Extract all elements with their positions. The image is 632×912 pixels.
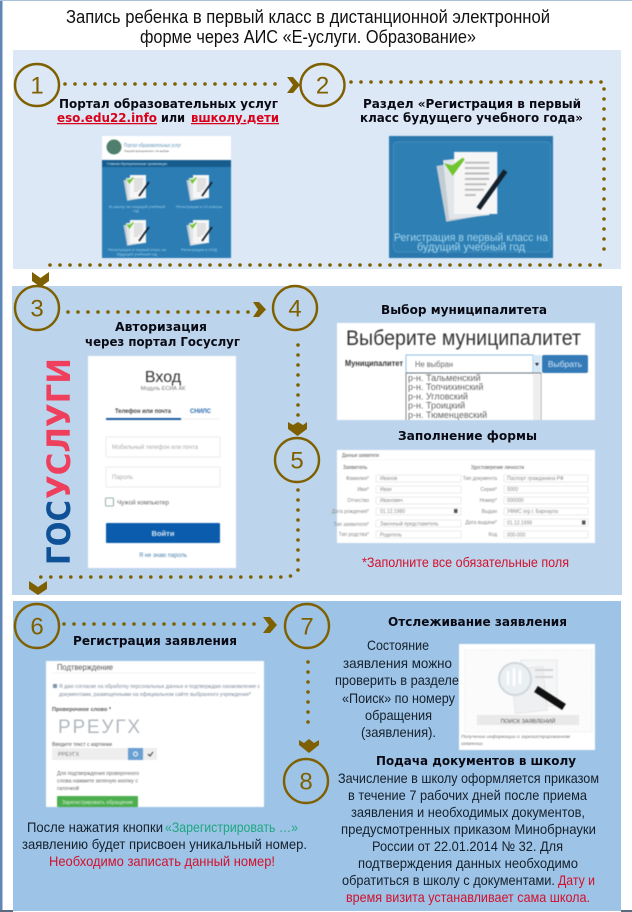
screenshot: registration section [389,136,553,258]
text: enrolment details [338,770,599,905]
heading: section: Раздел «Регистрация в первый [363,96,581,111]
screenshot: application form: Родитель [380,532,402,538]
screenshot: application form: Тип родства* [339,532,369,538]
text: unique number note: После нажатия кнопки [27,819,163,835]
screenshot: confirmation: Зарегистрировать обращение [62,800,133,806]
screenshot: portal: Портал образовательных услуг [124,143,181,149]
step 1 badge [15,64,59,106]
title: форме через АИС «Е-услуги. Образование» [140,27,476,47]
login card: Пароль [112,475,133,481]
screenshot: application form: Иванович [380,498,403,504]
logo: gosuslugi: УСЛУГИ [40,358,78,499]
screenshot: application form: Номер* [480,498,497,504]
text: enrolment details: Дату и [558,872,595,888]
arrow: step 4 to 5 [288,345,307,436]
screenshot: municipality select: Муниципалитет [345,359,403,368]
text: enrolment details: время визита устанавливает сама школа. [346,889,590,905]
heading: authorisation: через портал Госуслуг [85,334,240,349]
heading: tracking: Отслеживание заявления [388,614,567,629]
login card: Я не знаю пароль [139,553,187,559]
screenshot: application form: Дата рождения* [332,509,369,515]
text: enrolment details: в течение 7 рабочих дней после приема [348,787,587,803]
screenshot: application form: Серия* [480,487,497,493]
title [66,7,550,47]
step 2 badge [300,64,344,106]
screenshot: municipality select: р-н. Угловский [408,392,468,402]
screenshot: registration section: будущий учебный год [417,242,526,254]
screenshot: application form: Иванов [380,476,398,482]
login card: Вход [145,369,182,386]
screenshot: application form: Выдан [482,509,497,515]
text: enrolment details: предусмотренных приказом Минобрнауки [341,821,596,837]
screenshot: application form: Законный представитель [380,520,439,528]
screenshot: application form: Тип заявителя* [334,522,369,528]
heading: registration: Регистрация заявления [73,633,237,648]
screenshot: portal: будущий учебный год [117,252,158,256]
step 4 badge [273,286,317,330]
screenshot: application form: Иван [380,487,392,493]
screenshot: portal: Текущий муниципалитет: Не выбран [124,149,169,153]
screenshot: portal: Регистрация в первый класс на [108,248,167,252]
text: tracking status: заявления можно [343,655,452,671]
logo: gosuslugi: ГОС [40,500,78,565]
login card: Мобильный телефон или почта [112,444,199,451]
screenshot: confirmation [46,661,264,807]
heading: portal: вшколу.дети [191,110,279,125]
text: tracking status: Состояние [367,637,429,653]
panel: steps 6-8 [13,601,621,911]
text: unique number note: «Зарегистрировать …» [165,819,298,835]
step 3 badge: 3 [30,296,44,322]
arrow: step 7 to 8 [299,662,319,753]
text: tracking status: «Поиск» по номеру [342,690,455,706]
arrow: step 3 to 4 [68,302,266,317]
screenshot: application form: Паспорт гражданина РФ [507,476,564,482]
arrow: step 1 to 2 [65,77,300,93]
heading: authorisation: Авторизация [115,319,207,334]
step 6 badge [15,604,59,648]
screenshot: confirmation: документами, размещенными на официальном сайте выбранного учреждения* [59,691,252,698]
text: tracking status: (заявления). [361,724,436,740]
screenshot: municipality select: р-н. Тальменский [408,373,481,383]
text: enrolment details: заявления и необходимых документов, [351,804,585,820]
heading: fill form: Заполнение формы [398,428,537,443]
note: required fields: *Заполните все обязательные поля [362,555,569,570]
text: tracking status [335,637,459,740]
login card: Телефон или почта [115,408,172,415]
heading: portal: eso.edu22.info [57,110,157,125]
screenshot: municipality select: р-н. Топчихинский [408,382,483,392]
login card: Войти [152,529,175,538]
screenshot: application form: Данные заявителя [342,453,379,459]
logo: gosuslugi [40,358,78,565]
login card: СНИЛС [190,409,212,415]
screenshot: municipality select [337,323,595,420]
screenshot: portal: Главная Муниципальные организации [107,162,167,166]
heading: documents: Подача документов в школу [376,753,576,768]
step 7 badge [285,604,329,648]
screenshot: portal: год [133,209,139,213]
screenshot: confirmation: РРЕУГХ [58,717,140,738]
arrow: step 5 to 6 [29,490,298,595]
step 8 badge [284,759,328,803]
screenshot: application form: УФМС org г. Барнаула [507,509,558,515]
screenshot: municipality select: р-н. Тюменцевский [408,410,487,420]
heading: section [360,96,583,125]
text: enrolment details: обратиться в школу с документами. [342,872,555,888]
screenshot: confirmation: Подтверждение [57,662,113,672]
screenshot: application form: Заявитель [343,465,368,471]
screenshot: confirmation: галочкой [57,785,79,792]
screenshot: portal [102,136,231,258]
screenshot: municipality select: Выберите муниципалитет [346,327,581,350]
arrow: step 2 to 3 [32,82,604,287]
login card [88,356,236,568]
step 2 badge: 2 [316,72,329,100]
screenshot: application form [332,450,595,543]
screenshot: application form: Удостоверение личности [471,465,524,471]
screenshot: application search: заявлении [460,741,483,746]
arrow: step 6 to 7 [64,617,277,633]
screenshot: registration section: Регистрация в первый класс на [394,232,549,244]
step 5 badge [275,438,319,482]
panel: steps 1-2 [13,50,621,287]
screenshot: municipality select: Не выбран [415,359,453,369]
screenshot: confirmation: Проверочное слово * [52,707,112,713]
screenshot: application form: Тип документа [463,476,497,482]
text: enrolment details: России от 22.01.2014 № 32. Для [372,838,563,854]
screenshot: application form: 000-000 [507,532,526,538]
heading: section: класс будущего учебного года» [360,110,583,125]
screenshot: confirmation: Я даю согласие на обработку персональных данных и подтверждаю ознакомление с [59,684,260,690]
text: unique number note [22,819,307,869]
heading: authorisation [85,319,240,349]
login card: Модуль ЕСИА АК [141,386,186,392]
screenshot: portal: Регистрация в ООД [181,248,217,252]
screenshot: municipality select: Выбрать [548,359,583,369]
screenshot: application form: Дата выдачи* [465,520,497,526]
step 7 badge: 7 [300,614,314,640]
screenshot: portal: Регистрация в 10 классы [176,205,222,209]
text: enrolment details: Зачисление в школу оформляется приказом [338,770,599,786]
screenshot: application form: 01.12.1999 [507,520,532,526]
text: tracking status: обращения [365,707,432,723]
screenshot: application form: Имя* [357,487,369,493]
screenshot: application form: Отчество [347,498,369,504]
heading: municipality: Выбор муниципалитета [381,302,547,317]
step 1 badge: 1 [30,72,44,100]
text: unique number note: заявлению будет присвоен уникальный номер. [22,836,307,852]
screenshot: confirmation: РРЕУГХ [58,752,79,758]
step 5 badge: 5 [290,448,304,474]
title: Запись ребенка в первый класс в дистанционной электронной [66,7,550,27]
screenshot: portal: В школу на текущий учебный [109,205,165,209]
heading: portal: Портал образовательных услуг [59,96,278,111]
screenshot: application form: 000000 [507,498,524,504]
screenshot: application form: 01.12.1980 [380,509,405,515]
text: unique number note: Необходимо записать данный номер! [49,853,275,869]
screenshot: application form: Фамилия* [346,476,369,482]
screenshot: confirmation: Введите текст с картинки [52,742,112,748]
text: enrolment details: подтверждения данных необходимо [358,855,578,871]
step 4 badge: 4 [288,296,302,322]
heading: portal: или [161,110,185,125]
screenshot: confirmation: Для подтверждения проверочного [57,771,139,777]
screenshot: application form: 0000 [507,487,518,493]
panel: steps 3-5 [12,286,622,595]
screenshot: confirmation: слова нажмите зеленую кнопку с [57,778,138,784]
step 6 badge: 6 [30,614,44,640]
login card: Чужой компьютер [117,498,169,506]
left edge strip [0,0,2,912]
text: tracking status: проверить в разделе [335,672,459,688]
screenshot: municipality select: р-н. Троицкий [408,400,465,410]
screenshot: application search: ПОИСК ЗАЯВЛЕНИЙ [501,717,555,725]
screenshot: application search [459,644,595,750]
step 3 badge [15,286,59,330]
heading: portal [57,96,279,125]
screenshot: application search: Получение информации о зарегистрированном [461,734,570,739]
step 8 badge: 8 [299,768,313,796]
screenshot: application form: Код [488,532,497,538]
